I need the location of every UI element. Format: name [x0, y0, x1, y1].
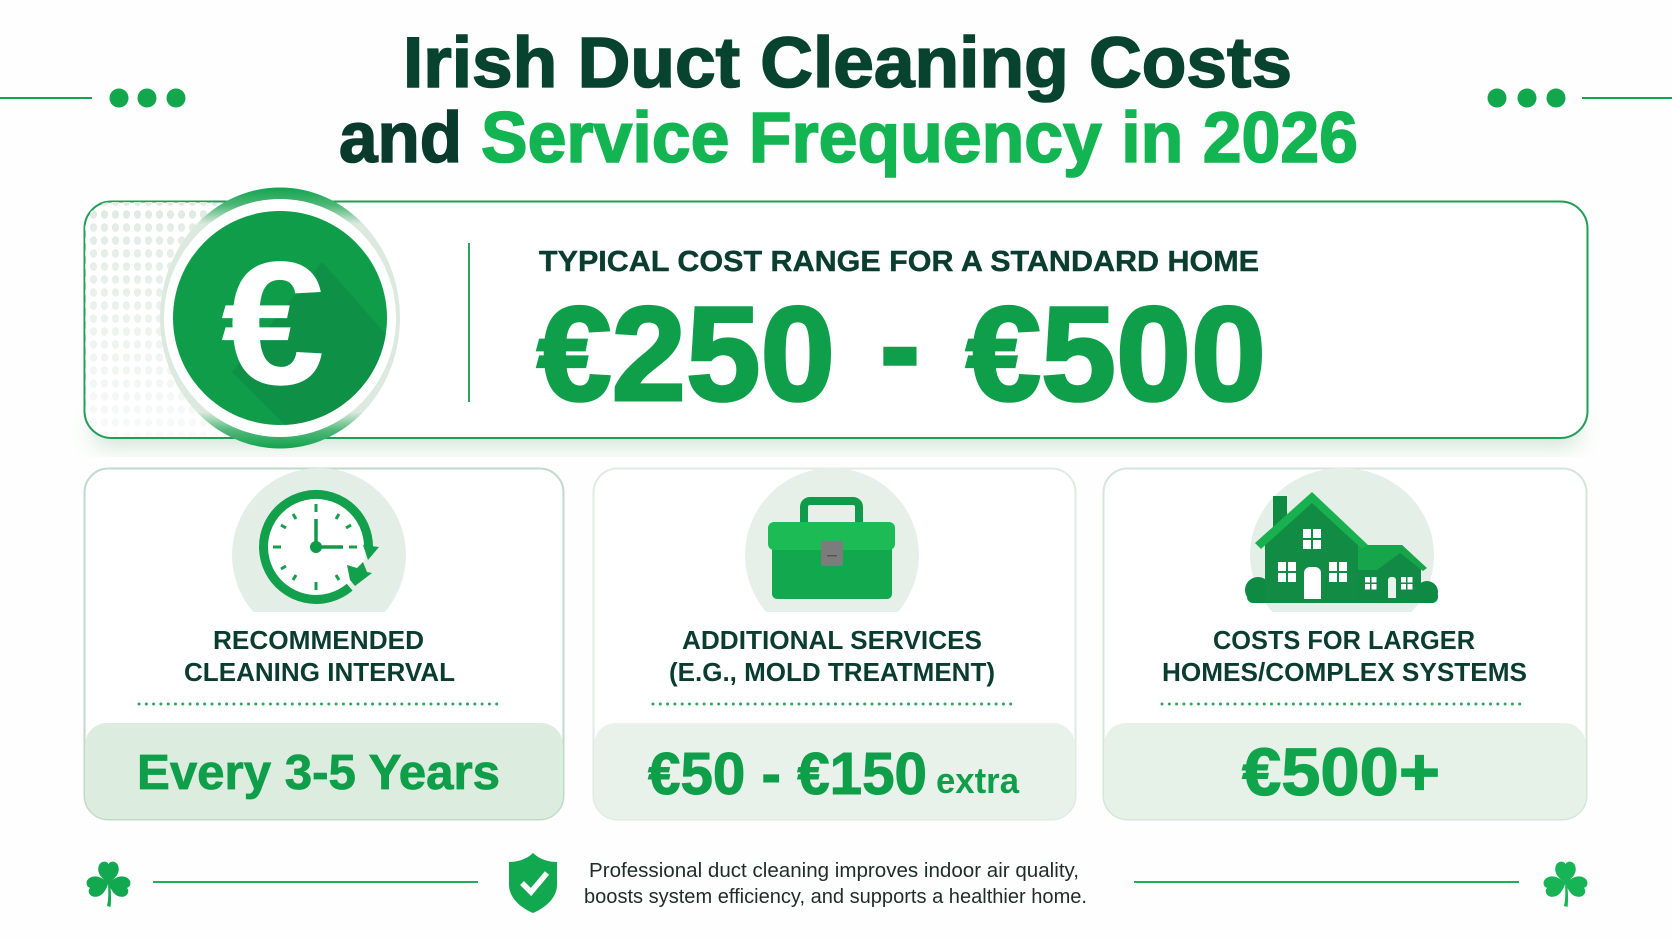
value: cost range	[537, 271, 1266, 429]
footer left line	[153, 881, 478, 883]
value: extra cost: extra	[936, 760, 1020, 801]
label: larger homes heading: COSTS FOR LARGER	[1213, 625, 1475, 655]
footer right line	[1134, 881, 1519, 883]
value: cost range: €500	[966, 280, 1266, 429]
label: larger homes heading	[1162, 625, 1527, 687]
decoration: right header line and dots	[1488, 88, 1672, 108]
label: additional services heading: (E.G., MOLD TREATMENT)	[669, 657, 995, 687]
label: additional services heading	[669, 625, 995, 687]
value: 500 plus: €500+	[1242, 735, 1440, 810]
icon: toolbox	[768, 501, 895, 599]
halftone texture	[85, 202, 218, 437]
value: cost range: €250	[537, 280, 835, 429]
footer text	[584, 860, 1087, 908]
panel: additional services	[594, 468, 1076, 820]
footer text: Professional duct cleaning improves indoor air quality,	[589, 860, 1079, 882]
label: interval heading	[184, 625, 455, 687]
panel: larger homes	[1104, 468, 1586, 820]
label: additional services heading: ADDITIONAL SERVICES	[682, 625, 982, 655]
icon: left shamrock	[85, 862, 132, 907]
value: extra cost: €50 - €150	[648, 741, 927, 807]
title: and	[339, 99, 462, 178]
icon: euro coin: €	[221, 226, 325, 422]
panel: recommended cleaning interval	[84, 468, 564, 820]
title	[339, 24, 1358, 178]
icon: house	[1245, 492, 1438, 603]
panel: typical cost range	[84, 188, 1588, 448]
footer text: boosts system efficiency, and supports a healthier home.	[584, 886, 1087, 908]
title: Service Frequency in 2026	[481, 99, 1358, 178]
value: every 3-5 years: Every 3-5 Years	[137, 746, 500, 800]
decoration: left header line and dots	[0, 88, 186, 108]
icon: euro coin	[160, 188, 400, 448]
label: cost range heading: TYPICAL COST RANGE FOR A STANDARD HOME	[539, 246, 1259, 278]
title: Irish Duct Cleaning Costs	[403, 24, 1292, 103]
value: cost range: -	[880, 271, 920, 420]
label: interval heading: CLEANING INTERVAL	[184, 657, 455, 687]
label: interval heading: RECOMMENDED	[213, 625, 424, 655]
icon: clock with arrow	[264, 494, 379, 599]
label: larger homes heading: HOMES/COMPLEX SYSTEMS	[1162, 657, 1527, 687]
icon: shield check	[509, 853, 557, 913]
icon: right shamrock	[1542, 862, 1589, 907]
